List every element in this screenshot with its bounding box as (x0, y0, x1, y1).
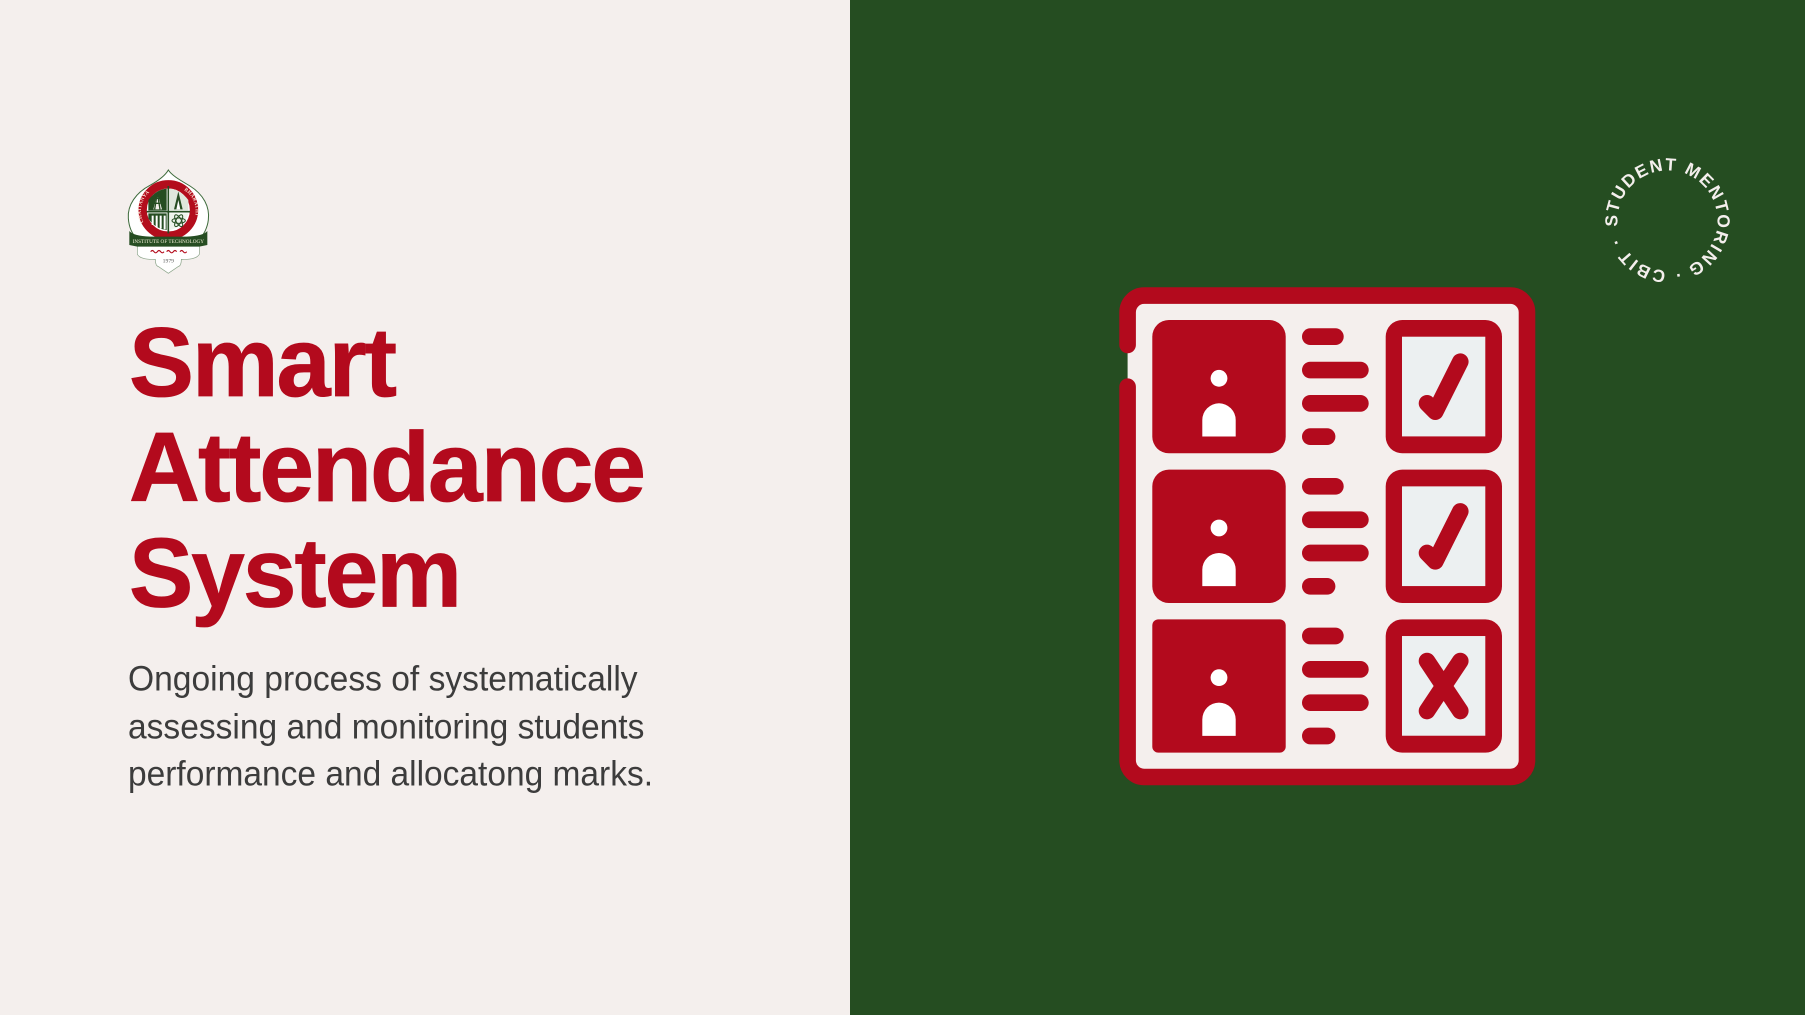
panel: right background (850, 0, 1805, 1015)
sheet border (1128, 296, 1527, 777)
description text: assessing and monitoring students (128, 707, 644, 746)
row 2: present (1152, 470, 1502, 603)
title: Smart (129, 307, 396, 417)
description text (128, 660, 653, 794)
description text: Ongoing process of systematically (128, 660, 638, 699)
logo: CBIT crest: CHAITANYA (138, 191, 150, 223)
row 1: present (1152, 320, 1502, 453)
sheet background (1128, 296, 1527, 777)
description text: performance and allocatong marks. (128, 755, 653, 794)
circular text badge: STUDENT MENTORING · CBIT · (1605, 158, 1730, 282)
logo: CBIT crest: INSTITUTE OF TECHNOLOGY (133, 239, 204, 245)
logo: CBIT crest (128, 169, 210, 274)
logo: CBIT crest: BHARATHI (184, 188, 199, 216)
title: System (129, 518, 460, 628)
icon: attendance sheet (1128, 296, 1527, 777)
row 3: absent (1152, 619, 1502, 753)
panel: left background (0, 0, 850, 1015)
title: Attendance (129, 412, 644, 522)
logo: CBIT crest: 1979 (163, 259, 174, 265)
title (129, 307, 644, 628)
